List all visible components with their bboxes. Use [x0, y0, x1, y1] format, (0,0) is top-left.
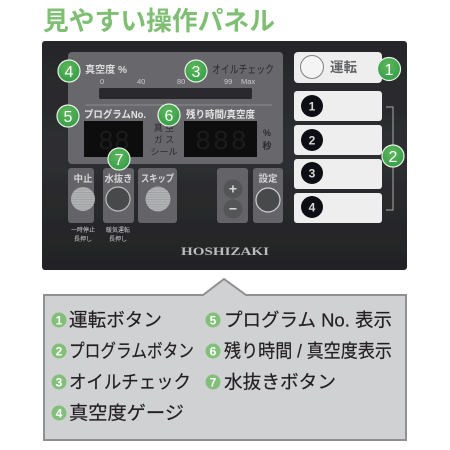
- button: run: [294, 52, 382, 83]
- badge 7: [108, 148, 130, 170]
- badge 5: 5: [64, 109, 73, 126]
- badge 6: 6: [165, 108, 174, 125]
- badge 6: [158, 104, 180, 126]
- badge 2: [382, 145, 404, 167]
- button: skip: スキップ: [141, 173, 174, 185]
- button: drain: 水抜き: [104, 173, 132, 185]
- legend item 4: 4: [56, 406, 63, 420]
- stop note: 長押し: [74, 235, 92, 243]
- remaining time label: 残り時間/真空度: [186, 108, 255, 121]
- mode labels: シール: [150, 147, 178, 157]
- legend item 7: 水抜きボタン: [224, 372, 336, 392]
- legend item 1: 1: [56, 314, 63, 328]
- mode labels: 真 空: [154, 122, 174, 133]
- oil check label: オイルチェック: [212, 63, 274, 76]
- button: skip: [138, 168, 177, 223]
- title: 見やすい操作パネル: [43, 6, 275, 36]
- stop note: 一時停止: [71, 226, 95, 234]
- panel: control panel: [42, 41, 407, 270]
- drain note: 暖気運転: [106, 226, 130, 234]
- gauge scale: Max: [241, 77, 255, 86]
- badge 2: 2: [389, 149, 398, 166]
- brand logo: HOSHIZAKI: [181, 244, 269, 258]
- bracket: [386, 107, 393, 210]
- gauge scale: 40: [137, 77, 145, 86]
- legend item 6: 残り時間 / 真空度表示: [224, 340, 392, 362]
- unit labels: 秒: [262, 140, 272, 151]
- legend item 1: 運転ボタン: [69, 310, 162, 330]
- program button 2: 2: [309, 134, 316, 148]
- button: settings: 設定: [258, 173, 278, 185]
- badge 4: [58, 60, 80, 82]
- button: stop: 中止: [73, 173, 93, 185]
- time display: 888: [195, 128, 247, 158]
- gauge scale: 0: [100, 77, 104, 86]
- badge 3: 3: [192, 64, 201, 81]
- button: plus minus: [217, 168, 248, 223]
- button: run: 運転: [330, 60, 357, 75]
- badge 1: 1: [385, 62, 394, 79]
- legend item 3: 3: [56, 376, 63, 390]
- badge 4: 4: [65, 64, 74, 81]
- program button 1: [294, 91, 382, 121]
- legend item 2: プログラムボタン: [69, 340, 194, 362]
- badge 1: [378, 58, 400, 80]
- legend item 3: オイルチェック: [69, 372, 191, 392]
- legend item 6: 6: [210, 344, 217, 358]
- gauge scale: 80: [177, 77, 185, 86]
- program label: プログラムNo.: [84, 108, 146, 121]
- program button 4: 4: [309, 200, 316, 214]
- legend item 4: 真空度ゲージ: [69, 402, 184, 424]
- program number display: [84, 121, 143, 158]
- program button 3: [294, 159, 382, 189]
- program button 1: 1: [309, 100, 316, 114]
- legend item 5: プログラム No. 表示: [224, 310, 392, 330]
- button: plus minus: −: [229, 200, 237, 216]
- panel: display area: [68, 52, 283, 164]
- legend item 5: 5: [210, 314, 217, 328]
- vacuum label: 真空度 %: [85, 63, 127, 76]
- button: plus minus: +: [229, 180, 237, 196]
- program button 2: [294, 125, 382, 155]
- mode labels: ガ ス: [154, 135, 174, 145]
- unit labels: %: [263, 128, 271, 138]
- callout: legend: [44, 279, 406, 440]
- program button 3: 3: [309, 166, 316, 180]
- vacuum gauge: [99, 88, 252, 99]
- legend item 2: 2: [56, 344, 63, 358]
- badge 5: [57, 105, 79, 127]
- button: settings: [253, 168, 283, 223]
- program number display: 88: [98, 128, 130, 158]
- drain note: 長押し: [109, 235, 127, 243]
- legend item 7: 7: [210, 376, 217, 390]
- time display: [184, 121, 257, 158]
- button: drain: [103, 168, 134, 223]
- badge 3: [185, 60, 207, 82]
- badge 7: 7: [115, 152, 124, 169]
- program button 4: [294, 193, 382, 223]
- button: stop: [68, 168, 95, 223]
- gauge scale: 99: [224, 77, 232, 86]
